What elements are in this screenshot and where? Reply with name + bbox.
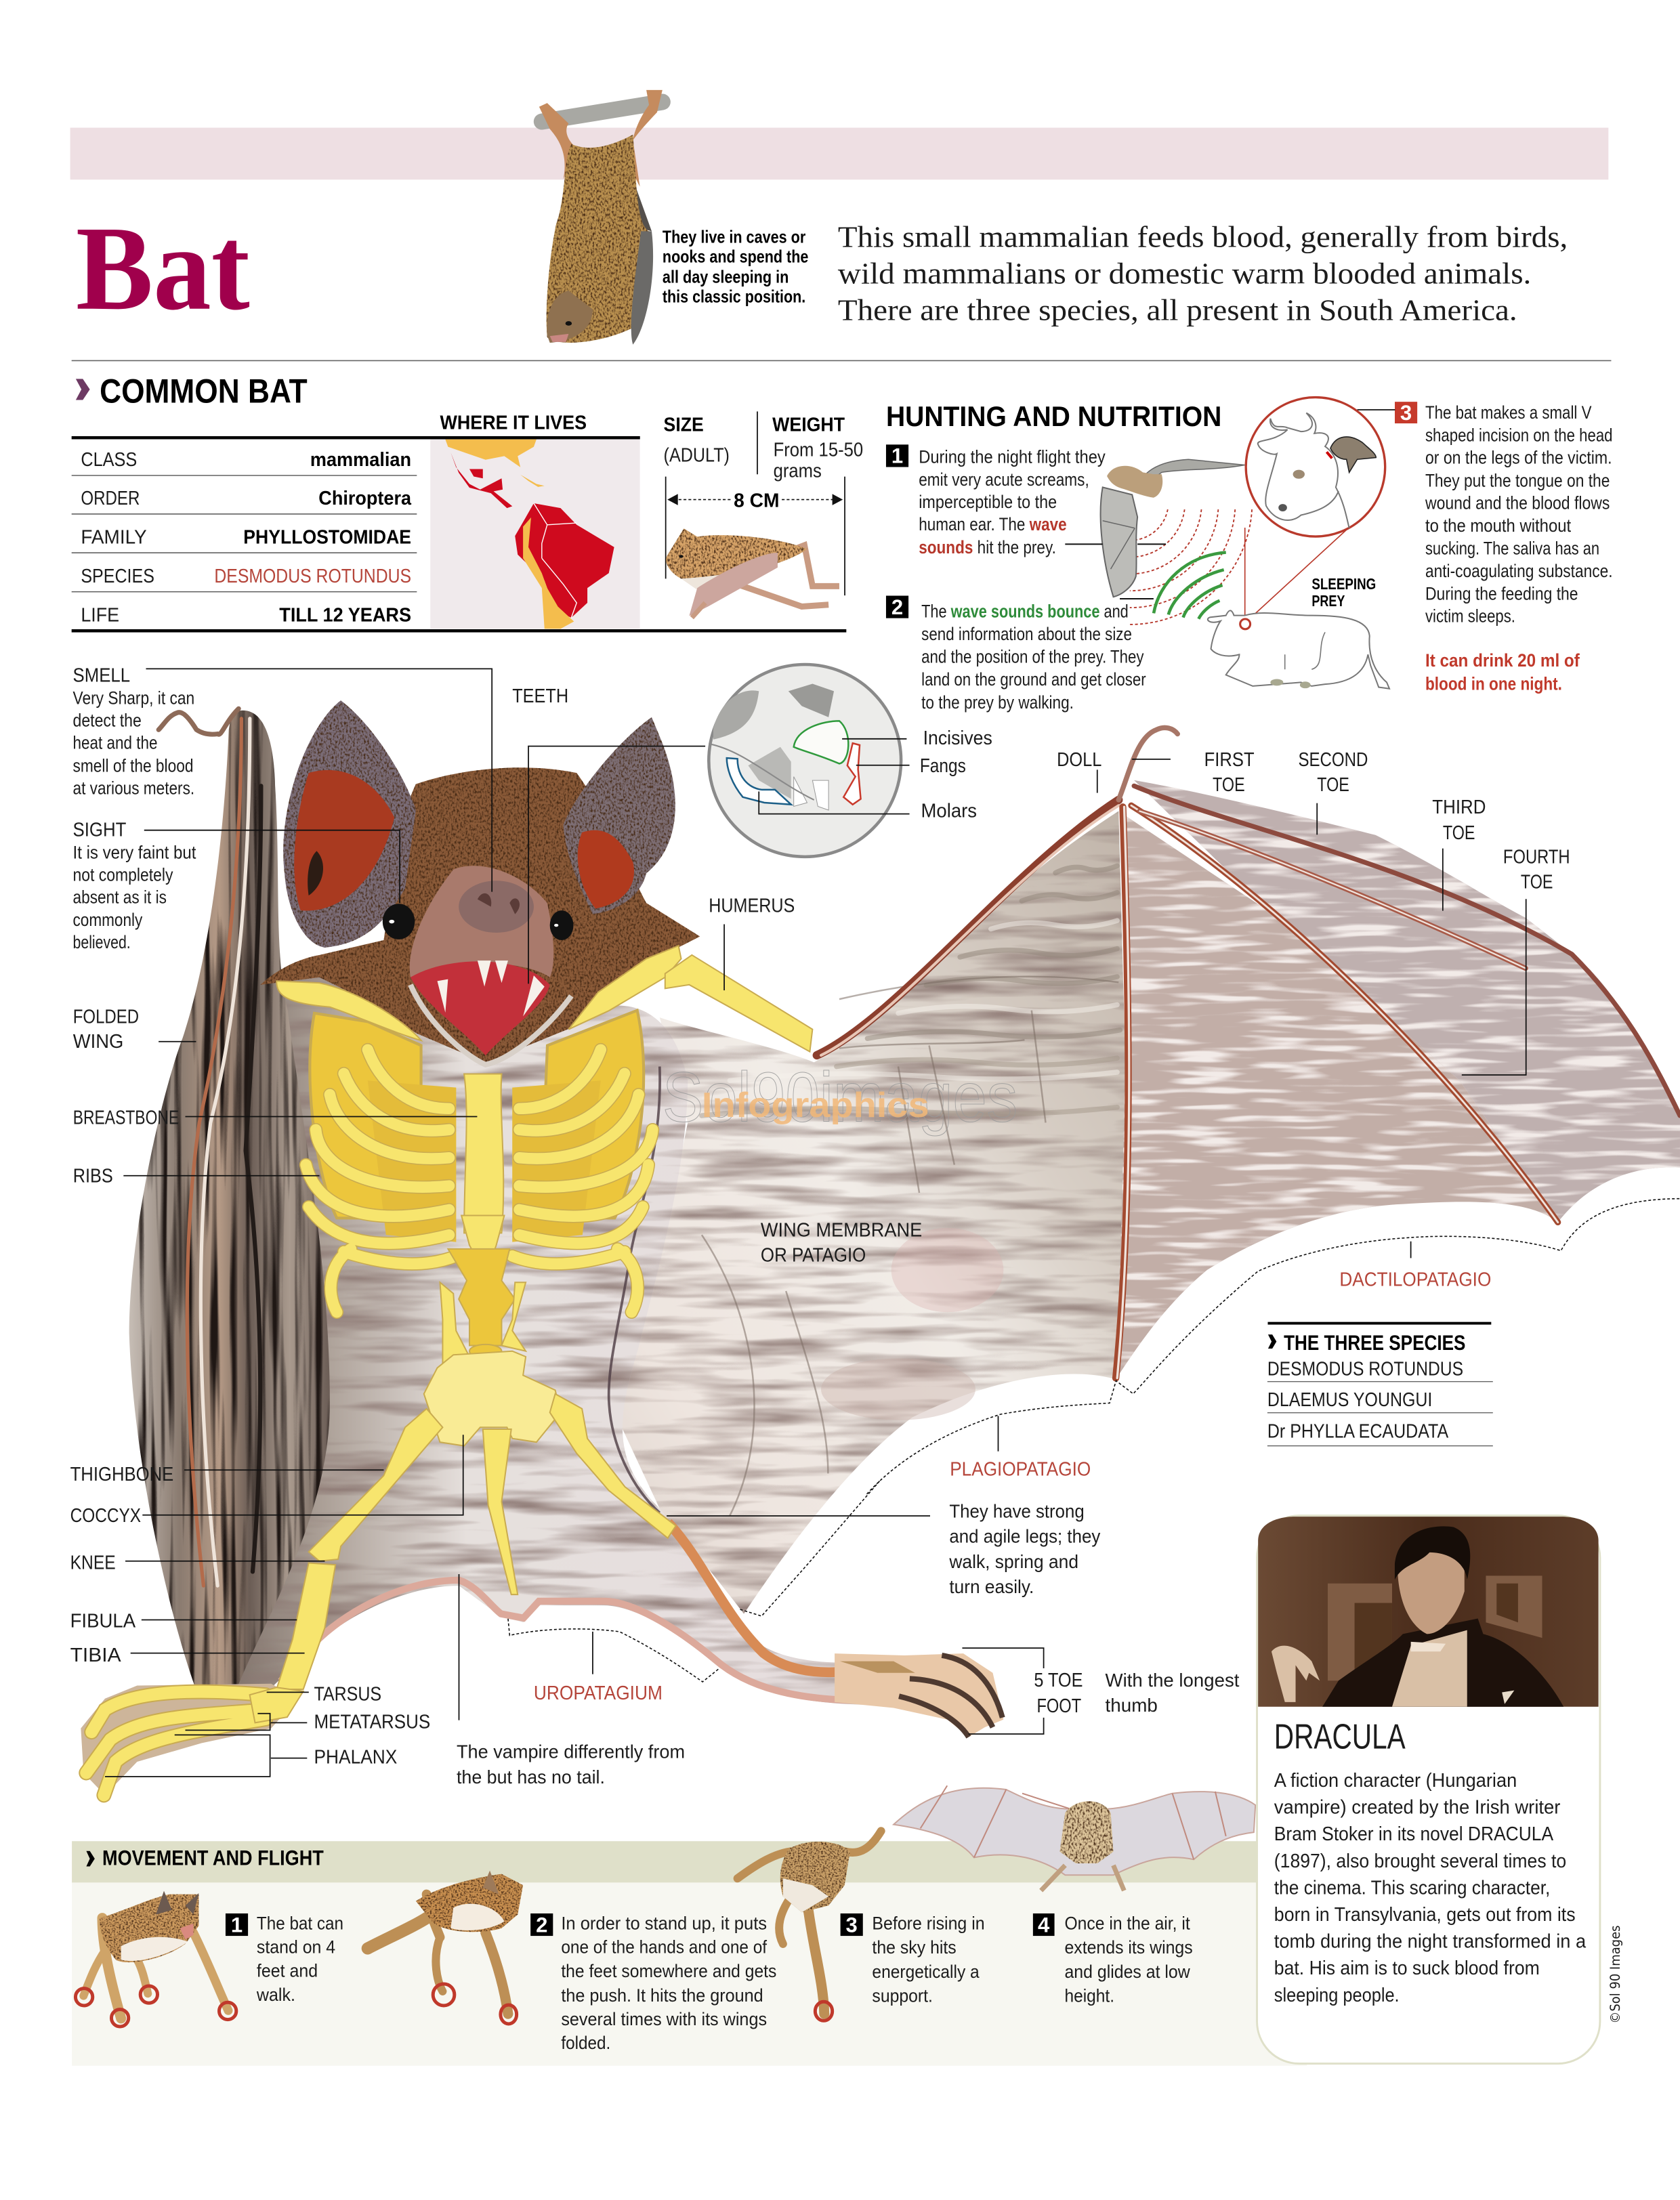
facts table: SPECIES	[81, 566, 154, 587]
label: folded wing: FOLDED	[73, 1006, 139, 1028]
map: range in the Americas	[430, 440, 640, 629]
watermark: Sol90images	[663, 1057, 1017, 1136]
wing bones	[817, 727, 1680, 1378]
step text 1	[226, 1913, 343, 2005]
illustration: bat gliding	[894, 1785, 1255, 1890]
step 2: send information about the size	[921, 624, 1132, 644]
illustration: bat on four feet	[75, 1891, 236, 2027]
label: strong legs: turn easily.	[949, 1575, 1034, 1597]
text: dracula: born in Transylvania, gets out from its	[1274, 1904, 1576, 1926]
label: sight: believed.	[73, 932, 131, 952]
step text 4: 4	[1038, 1913, 1050, 1937]
facts table: PHYLLOSTOMIDAE	[243, 526, 411, 548]
caption: hanging position: nooks and spend the	[663, 247, 808, 266]
label: fibula: FIBULA	[70, 1610, 136, 1632]
label: smell: smell of the blood	[73, 756, 194, 776]
panel: common bat	[72, 373, 846, 633]
step text 1: walk.	[256, 1985, 295, 2005]
step text 4	[1033, 1913, 1193, 2006]
step text 2: folded.	[561, 2033, 610, 2053]
icon: chevron	[86, 1851, 95, 1867]
label: fourth toe	[1462, 847, 1570, 1075]
step text 1: feet and	[257, 1960, 318, 1981]
photo: dracula	[1258, 1517, 1599, 1707]
label: smell: Very Sharp, it can	[73, 688, 194, 708]
title: Bat	[76, 201, 250, 335]
step 3: anti-coagulating substance.	[1425, 561, 1613, 581]
illustration: bat rising	[738, 1831, 881, 2021]
step 3: 3	[1400, 401, 1412, 425]
caption: hanging position: They live in caves or	[663, 228, 805, 247]
callout: blood per night: blood in one night.	[1425, 673, 1562, 694]
label: second toe	[1298, 749, 1368, 834]
label: no tail	[457, 1574, 685, 1788]
step text 2	[530, 1913, 776, 2053]
head and ears	[260, 700, 700, 1065]
icon: chevron	[76, 379, 90, 400]
body and tail membrane	[225, 956, 898, 1705]
labels: anatomy	[70, 665, 1570, 1788]
label: breastbone: BREASTBONE	[73, 1107, 179, 1129]
label: first toe	[1204, 749, 1255, 796]
step text 3	[841, 1913, 985, 2006]
wing membrane: outer	[1134, 780, 1680, 1223]
step 3: wound and the blood flows	[1425, 493, 1610, 513]
panel: the three species: Dr PHYLLA ECAUDATA	[1267, 1420, 1449, 1442]
step 3: or on the legs of the victim.	[1425, 448, 1612, 468]
step text 3: the sky hits	[872, 1937, 957, 1958]
label: tibia: TIBIA	[70, 1645, 121, 1666]
label: humerus: HUMERUS	[709, 895, 795, 917]
labels: teeth types: Incisives	[923, 727, 992, 749]
intro text: This small mammalian feeds blood, generally from birds,	[838, 220, 1568, 254]
label: coccyx: COCCYX	[70, 1505, 141, 1527]
label: sight: not completely	[73, 864, 173, 885]
step 2: The wave sounds bounce and	[921, 601, 1129, 622]
step text 3: support.	[872, 1985, 933, 2006]
panel: hunting and nutrition	[886, 398, 1613, 713]
label: strong legs	[667, 1500, 1101, 1597]
text: dracula: Bram Stoker in its novel DRACULA	[1274, 1823, 1554, 1845]
label: wing membrane	[761, 1219, 922, 1267]
facts table: CLASS	[81, 449, 137, 471]
caption: hanging position: all day sleeping in	[663, 268, 789, 287]
label: tarsus: TARSUS	[314, 1683, 381, 1705]
step 3: shaped incision on the head	[1425, 425, 1613, 445]
panel: size and weight: (ADULT)	[664, 445, 730, 467]
skeleton: spine, pelvis and legs	[276, 1216, 676, 1689]
text: dracula: vampire) created by the Irish writer	[1274, 1797, 1561, 1819]
label: wing membrane: WING MEMBRANE	[761, 1219, 922, 1241]
label: ribs: RIBS	[73, 1166, 113, 1187]
label: uropatagium: UROPATAGIUM	[534, 1683, 663, 1704]
step text 1: stand on 4	[257, 1937, 335, 1957]
label: wing membrane: OR PATAGIO	[761, 1245, 866, 1267]
panel: size and weight: SIZE	[664, 415, 704, 436]
step 2: to the prey by walking.	[921, 692, 1074, 713]
text: dracula: (1897), also brought several times to	[1274, 1850, 1566, 1872]
header band	[70, 128, 1608, 179]
facts table: FAMILY	[81, 526, 147, 548]
label: third toe: TOE	[1443, 822, 1475, 844]
step text 2: 2	[536, 1913, 547, 1937]
step 3	[1357, 401, 1613, 627]
tail membrane edge	[280, 1580, 898, 1701]
label: no tail: The vampire differently from	[457, 1741, 685, 1762]
membrane stripes	[702, 866, 1120, 1116]
text: dracula: sleeping people.	[1274, 1985, 1400, 2006]
label: teeth	[512, 685, 705, 983]
panel: the three species	[1267, 1322, 1493, 1446]
labels: teeth types	[920, 727, 992, 822]
folded wing	[129, 711, 330, 1691]
step 3: sucking. The saliva has an	[1425, 538, 1599, 558]
panel: the three species: DESMODUS ROTUNDUS	[1267, 1358, 1463, 1380]
credit: ©Sol 90 Images	[1608, 1926, 1623, 2024]
dashed membrane outlines	[508, 1199, 1680, 1682]
step 1: 1	[891, 444, 903, 468]
label: metatarsus	[185, 1712, 430, 1733]
step text 2: the push. It hits the ground	[561, 1985, 763, 2006]
step 1: sounds hit the prey.	[919, 537, 1056, 557]
skeleton: ribcage	[306, 1011, 652, 1312]
label: thighbone: THIGHBONE	[70, 1464, 173, 1485]
label: first toe: FIRST	[1204, 749, 1255, 771]
label: phalanx	[105, 1735, 397, 1777]
left foot	[81, 1684, 303, 1795]
panel: size and weight: From 15-50	[774, 439, 863, 461]
labels: teeth types: Molars	[921, 801, 977, 822]
label: fourth toe: FOURTH	[1503, 847, 1570, 868]
label: third toe	[1432, 797, 1486, 911]
panel: size and weight: grams	[774, 460, 822, 482]
heading: where it lives: WHERE IT LIVES	[440, 412, 587, 433]
facts table: mammalian	[310, 449, 411, 471]
facts table	[72, 449, 417, 626]
right foot	[835, 1653, 1003, 1737]
label: smell: SMELL	[73, 665, 130, 687]
icon: sleeping prey: SLEEPING	[1311, 575, 1376, 593]
step text 4: and glides at low	[1064, 1962, 1191, 1982]
label: five toe foot: 5 TOE	[1034, 1670, 1083, 1691]
step text 4: extends its wings	[1064, 1937, 1193, 1958]
heading: dracula: DRACULA	[1274, 1716, 1406, 1756]
callout: blood per night: It can drink 20 ml of	[1425, 650, 1580, 671]
skull detail	[709, 664, 910, 857]
heading: hunting and nutrition: HUNTING AND NUTRITION	[886, 400, 1221, 432]
step 3: During the feeding the	[1425, 584, 1578, 604]
label: first toe: TOE	[1213, 774, 1245, 796]
facts table: Chiroptera	[318, 488, 412, 509]
label: fourth toe: TOE	[1521, 871, 1553, 893]
panel: size and weight: 8 CM	[734, 490, 779, 512]
label: five toe foot: thumb	[1106, 1694, 1158, 1716]
icon: sleeping prey: PREY	[1311, 592, 1345, 610]
chart: sound waves	[1130, 509, 1252, 625]
label: sight: commonly	[73, 910, 143, 930]
panel: the three species: THE THREE SPECIES	[1284, 1331, 1465, 1355]
intro text: wild mammalians or domestic warm blooded animals.	[838, 257, 1531, 291]
label: smell	[73, 665, 492, 892]
icon: flying bat sonar	[1065, 459, 1244, 599]
label: dactilopatagio: DACTILOPATAGIO	[1339, 1269, 1491, 1291]
label: no tail: the but has no tail.	[457, 1766, 605, 1788]
step 3: They put the tongue on the	[1425, 470, 1610, 490]
step text 3: Before rising in	[872, 1913, 985, 1934]
label: smell: at various meters.	[73, 778, 194, 799]
skeleton: upper bones	[276, 946, 812, 1233]
icon: bat side view	[666, 528, 839, 618]
label: phalanx: PHALANX	[314, 1747, 397, 1769]
step 3: victim sleeps.	[1425, 606, 1515, 627]
text: dracula: tomb during the night transformed in a	[1274, 1930, 1587, 1952]
label: second toe: TOE	[1317, 774, 1349, 796]
step 1	[886, 444, 1106, 557]
label: sight: SIGHT	[73, 819, 127, 841]
caption: hanging position	[663, 228, 808, 306]
magnifier: cow head with bat	[1245, 398, 1385, 623]
step 2	[886, 595, 1146, 713]
step 2: 2	[891, 595, 903, 619]
illustration: bat standing up	[368, 1871, 523, 2024]
panel: dracula	[1257, 1516, 1600, 2064]
step text 2: In order to stand up, it puts	[561, 1913, 767, 1933]
label: smell: detect the	[73, 711, 142, 731]
step 2: and the position of the prey. They	[921, 646, 1144, 667]
label: strong legs: They have strong	[949, 1500, 1085, 1521]
step text 2: one of the hands and one of	[561, 1937, 768, 1957]
label: five toe foot: With the longest	[1106, 1669, 1240, 1691]
label: knee: KNEE	[70, 1552, 116, 1574]
step text 3: energetically a	[872, 1962, 980, 1982]
intro text: There are three species, all present in South America.	[838, 293, 1517, 326]
label: folded wing: WING	[73, 1031, 123, 1053]
label: teeth: TEETH	[512, 685, 568, 707]
folded wing stripes	[159, 708, 261, 1586]
label: coccyx	[70, 1435, 463, 1527]
label: strong legs: walk, spring and	[948, 1550, 1078, 1572]
step text 4: Once in the air, it	[1064, 1913, 1190, 1934]
text: dracula: bat. His aim is to suck blood from	[1274, 1958, 1540, 1979]
icon: hanging bat	[539, 90, 663, 345]
label: sight	[73, 819, 400, 952]
label: five toe foot: FOOT	[1036, 1695, 1081, 1717]
step 1: human ear. The wave	[919, 514, 1067, 534]
label: folded wing	[73, 1006, 196, 1053]
label: five toe foot	[962, 1648, 1240, 1734]
intro text	[838, 220, 1568, 326]
label: metatarsus: METATARSUS	[314, 1712, 430, 1733]
watermark: Infographics	[702, 1085, 929, 1124]
text: dracula: the cinema. This scaring character,	[1274, 1877, 1550, 1899]
step 3: The bat makes a small V	[1425, 402, 1592, 423]
facts table: LIFE	[81, 604, 119, 626]
panel: size and weight: WEIGHT	[772, 415, 845, 436]
step text 1: The bat can	[257, 1913, 343, 1933]
step 2: land on the ground and get closer	[921, 669, 1146, 690]
step 1: imperceptible to the	[919, 492, 1057, 512]
panel: the three species: DLAEMUS YOUNGUI	[1267, 1389, 1432, 1411]
step text 2: several times with its wings	[561, 2009, 767, 2029]
wing membrane: dactilopatagium	[1116, 814, 1558, 1380]
step 1: emit very acute screams,	[919, 469, 1089, 490]
callout: blood per night	[1425, 650, 1580, 694]
labels: teeth types: Fangs	[920, 755, 966, 777]
caption: hanging position: this classic position.	[663, 287, 805, 306]
panel: size and weight	[664, 411, 863, 618]
label: smell: heat and the	[73, 733, 157, 753]
icon: sleeping prey	[1208, 575, 1389, 689]
text: dracula: A fiction character (Hungarian	[1274, 1770, 1517, 1792]
heading: movement and flight: MOVEMENT AND FLIGHT	[102, 1846, 324, 1869]
text: dracula	[1274, 1770, 1587, 2006]
facts table: DESMODUS ROTUNDUS	[214, 566, 411, 587]
label: third toe: THIRD	[1432, 797, 1486, 818]
label: doll: DOLL	[1057, 749, 1101, 771]
step text 1: 1	[231, 1913, 243, 1937]
step 3: to the mouth without	[1425, 515, 1572, 536]
label: sight: It is very faint but	[73, 842, 196, 862]
label: plagiopatagio: PLAGIOPATAGIO	[950, 1459, 1091, 1481]
label: sight: absent as it is	[73, 887, 167, 908]
step text 2: the feet somewhere and gets	[561, 1961, 776, 1981]
facts table: TILL 12 YEARS	[279, 604, 411, 626]
membrane veins	[702, 977, 1118, 1516]
heading: common bat: COMMON BAT	[100, 373, 308, 410]
label: strong legs: and agile legs; they	[949, 1525, 1101, 1547]
step text 3: 3	[846, 1913, 858, 1937]
panel: movement and flight	[72, 1785, 1307, 2066]
label: second toe: SECOND	[1298, 749, 1368, 771]
facts table: ORDER	[81, 488, 140, 509]
wing membrane: plagiopatagium	[610, 811, 1127, 1614]
step 1: During the night flight they	[919, 447, 1106, 467]
step text 4: height.	[1064, 1985, 1114, 2006]
illustration: large bat	[81, 700, 1680, 1795]
